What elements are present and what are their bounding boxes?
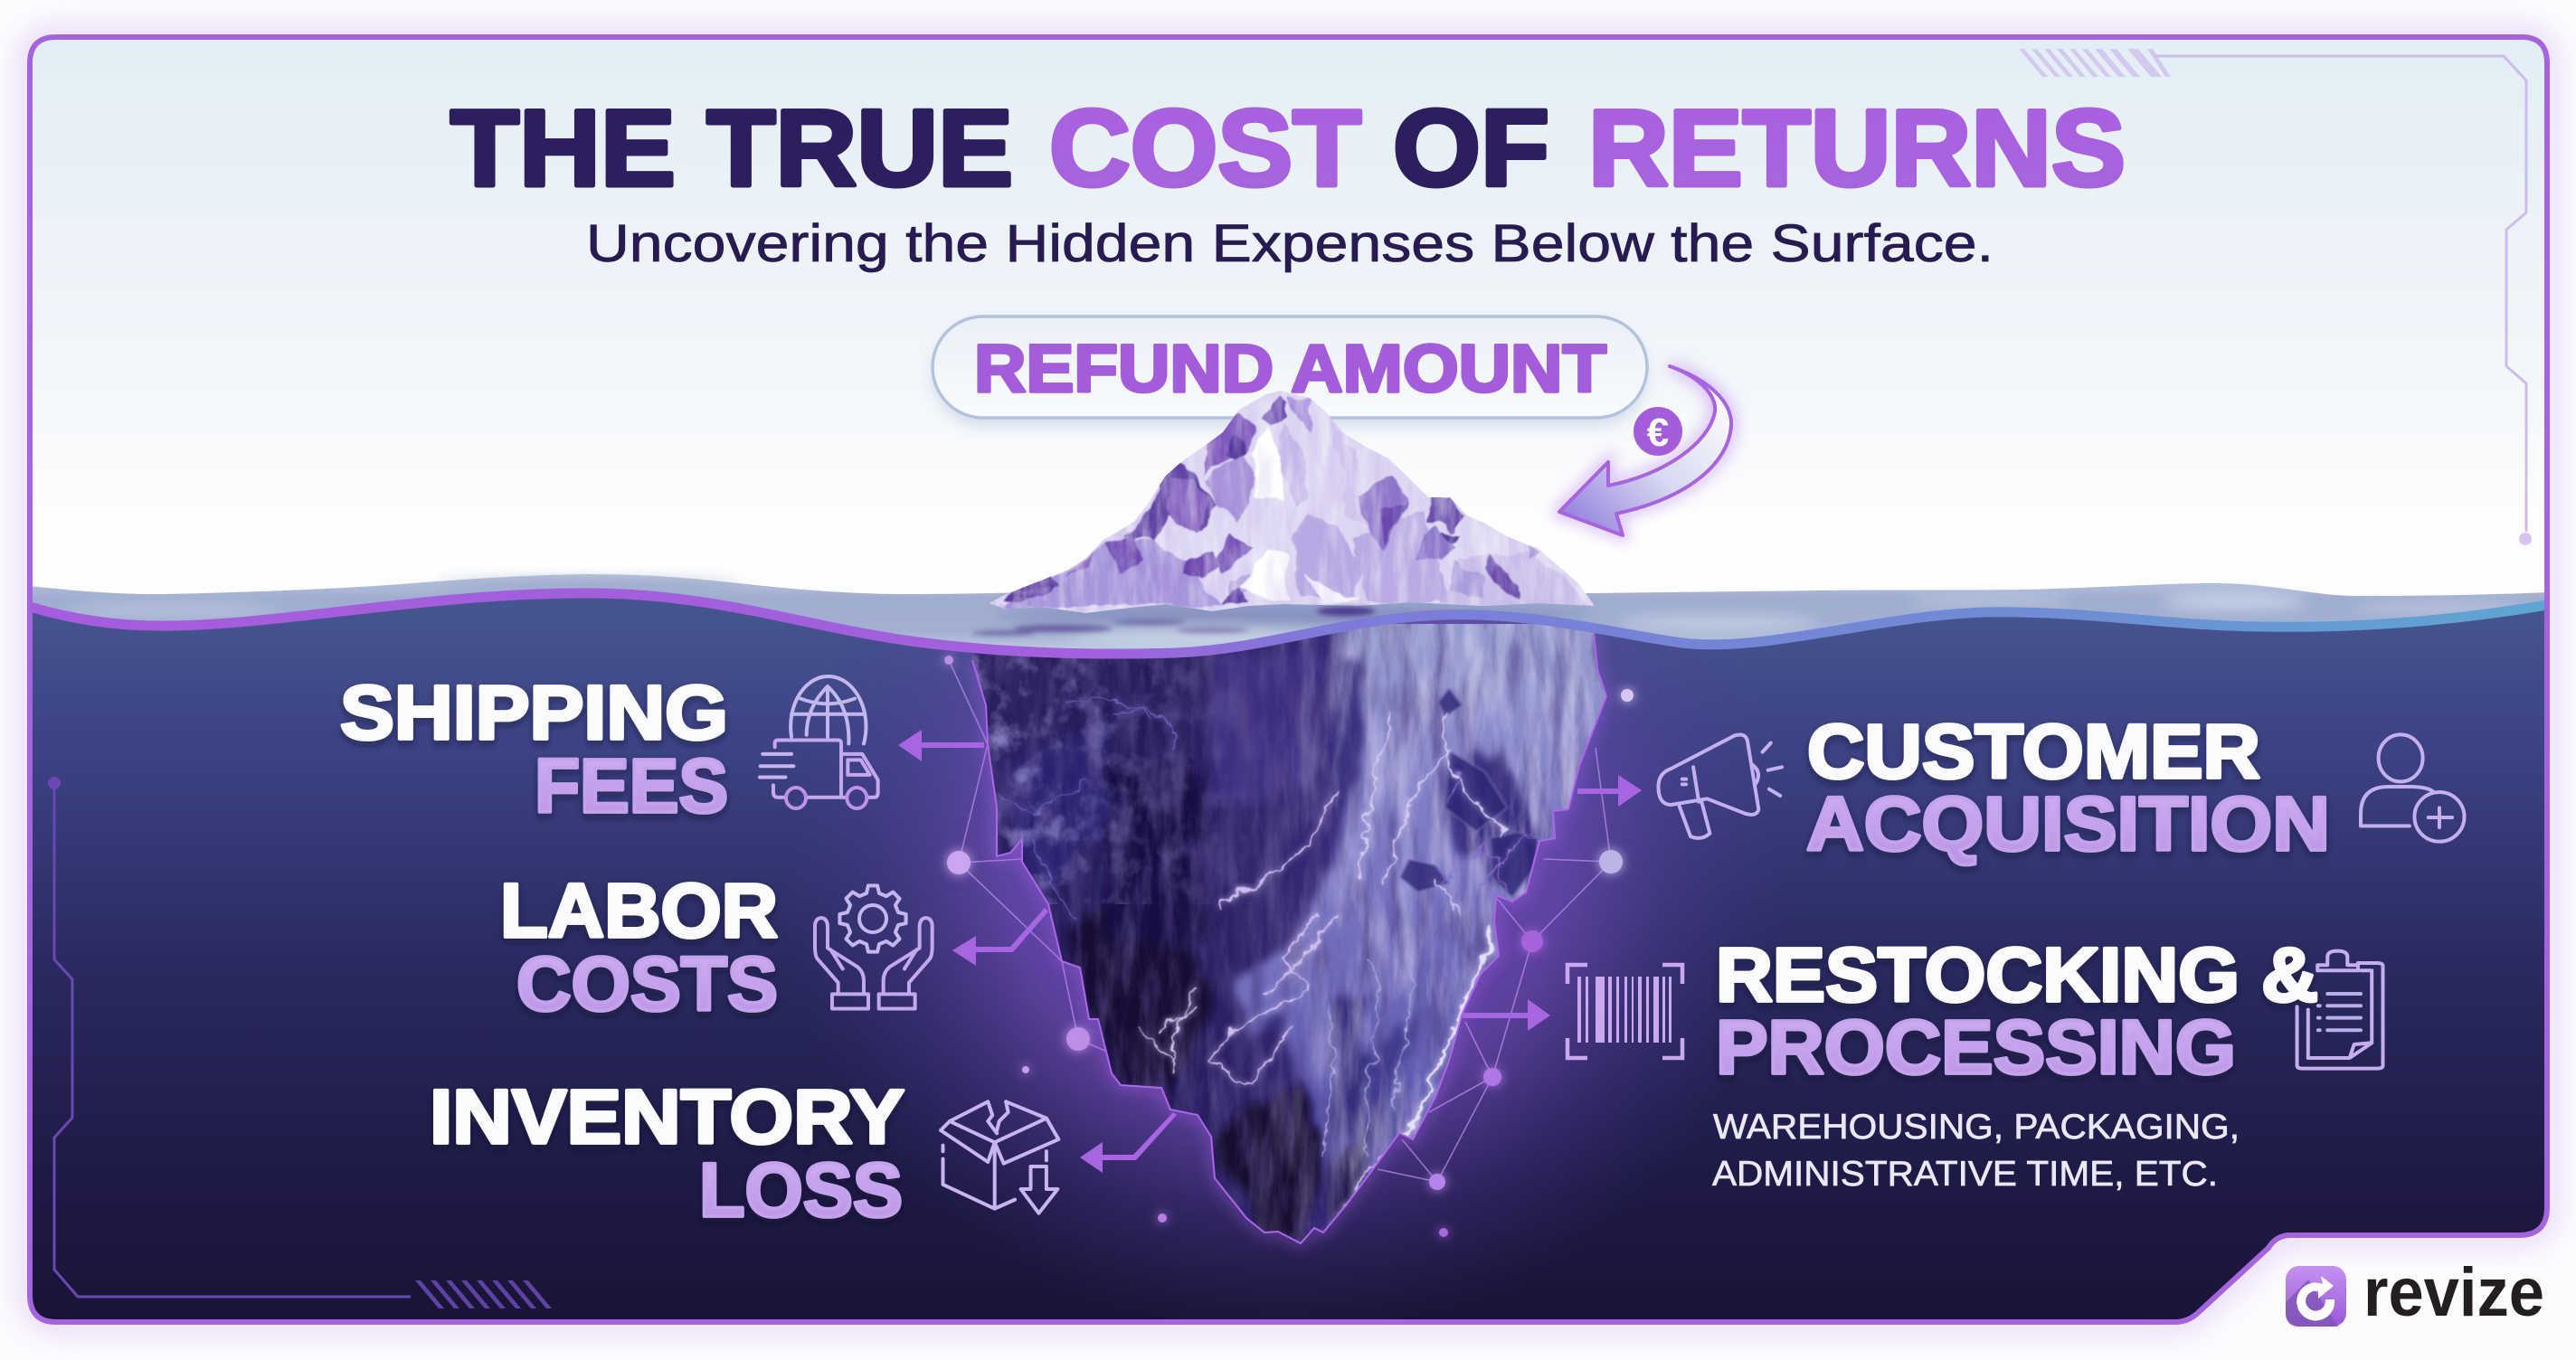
iceberg edge highlight: [972, 624, 1606, 1243]
restocking detail text: [1712, 1108, 2240, 1194]
label: inventory loss: LOSS: [699, 1148, 903, 1232]
white logo backing: [2288, 1261, 2551, 1329]
euro coin icon: [1634, 407, 1682, 456]
label: customer acquisition: [1806, 709, 2330, 866]
arrow: labor costs: [952, 908, 1048, 966]
callout arrow from refund amount to iceberg: [1559, 366, 1731, 535]
refund amount pill: REFUND AMOUNT: [974, 331, 1606, 406]
label: labor costs: LABOR: [500, 868, 778, 953]
iceberg above water: [972, 384, 1610, 636]
refund amount pill: [933, 316, 1647, 427]
label: restocking and processing: [1716, 932, 2318, 1090]
label: restocking and processing: RESTOCKING &: [1716, 932, 2318, 1017]
network lines and nodes: [944, 656, 1634, 1237]
label: inventory loss: [430, 1074, 904, 1232]
label: shipping fees: SHIPPING: [340, 670, 728, 755]
icon: hands holding gear: [815, 885, 933, 1008]
subtitle: Uncovering the Hidden Expenses Below the Surface.: [586, 214, 1994, 273]
iceberg veins: [999, 697, 1544, 1232]
logo: revize: [2286, 1254, 2544, 1331]
label: labor costs: COSTS: [516, 941, 778, 1026]
icon: user with plus: [2361, 734, 2465, 842]
arrow: customer acquisition: [1577, 775, 1642, 807]
icon: globe and delivery truck: [760, 676, 878, 808]
arrow: inventory loss: [1080, 1112, 1177, 1173]
euro coin icon: €: [1647, 411, 1669, 455]
title: COST: [1049, 88, 1361, 209]
label: restocking and processing: PROCESSING: [1716, 1005, 2236, 1090]
waterline shadows: [972, 607, 1375, 636]
sky background: [30, 37, 2547, 634]
label: customer acquisition: ACQUISITION: [1806, 781, 2330, 866]
arrow: shipping fees: [898, 730, 984, 761]
wave line: [30, 593, 2547, 654]
arrow: restocking and processing: [1463, 999, 1550, 1031]
iceberg below water: [959, 615, 1628, 1266]
logo wordmark: revize: [2363, 1254, 2544, 1331]
underwater sea: [30, 593, 2547, 1329]
label: labor costs: [500, 868, 778, 1026]
icon: clipboard: [2297, 951, 2382, 1069]
logo icon: [2286, 1266, 2346, 1327]
decorative tech frame: top right: [2019, 49, 2532, 545]
restocking detail text: ADMINISTRATIVE TIME, ETC.: [1712, 1155, 2218, 1194]
title: [449, 107, 2124, 188]
restocking detail text: WAREHOUSING, PACKAGING,: [1713, 1108, 2240, 1147]
label: shipping fees: FEES: [535, 743, 728, 828]
icon: megaphone: [1658, 734, 1782, 838]
label: shipping fees: [340, 670, 728, 828]
label: inventory loss: INVENTORY: [430, 1074, 904, 1159]
label: customer acquisition: CUSTOMER: [1807, 709, 2260, 794]
title: OF: [1393, 88, 1549, 209]
icon: damaged box with down arrow: [941, 1101, 1058, 1214]
decorative tech frame: bottom left: [48, 777, 552, 1308]
water surface band: [33, 571, 2544, 649]
icon: barcode scanner: [1567, 965, 1682, 1058]
title: THE TRUE: [450, 88, 1013, 209]
iceberg scale facets: [1399, 687, 1539, 898]
title: RETURNS: [1588, 88, 2126, 209]
iceberg glow: [724, 597, 1845, 1329]
